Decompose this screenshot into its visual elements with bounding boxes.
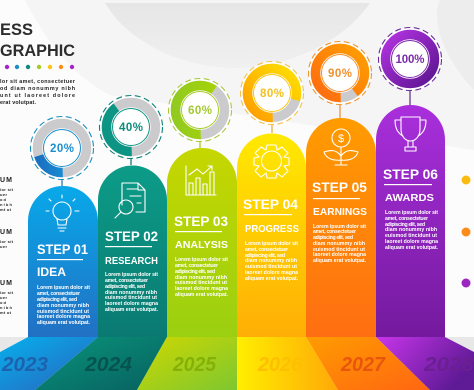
left side list: uer [0, 244, 7, 249]
left side list: uer [0, 295, 7, 300]
years [1, 354, 474, 376]
step 1 paragraph [37, 285, 91, 326]
left side list: nibh [0, 305, 13, 310]
icon: trophy [395, 117, 426, 151]
step 1 text: STEP 01 [37, 242, 88, 257]
step 2 paragraph: adipiscing elit, sed [105, 284, 145, 290]
left side list: uer [0, 192, 7, 197]
step 2 paragraph [105, 272, 159, 313]
colored dots row [5, 65, 74, 69]
step 4 paragraph: laoreet dolore magna [245, 270, 298, 276]
icon: dollar sign: $ [338, 133, 344, 145]
step 3 paragraph: laoreet dolore magna [175, 286, 228, 292]
step 4 [237, 134, 306, 337]
step 1 text: IDEA [37, 265, 66, 279]
step 1 paragraph: adipiscing elit, sed [37, 297, 77, 303]
intro paragraph [0, 79, 76, 106]
step 1 [28, 186, 98, 337]
progress ring 60%: 60% [188, 105, 212, 117]
step 1 paragraph: aliquam erat volutpat. [37, 320, 91, 326]
step 3 paragraph: Lorem ipsum dolor sit [175, 257, 228, 263]
step 5 paragraph: aliquam erat volutpat. [313, 258, 367, 264]
icon: gear [254, 145, 289, 178]
step 6 paragraph: amet, consectetuer [385, 216, 428, 222]
right side bullets [462, 176, 470, 288]
left side list: mt ut [0, 310, 12, 315]
years: 2024 [84, 354, 132, 376]
step 4 paragraph: aliquam erat volutpat. [245, 276, 299, 282]
step 4 paragraph: diam nonummy nibh [245, 258, 297, 264]
step 6 paragraph: aliquam erat volutpat. [385, 245, 439, 251]
progress ring 90%: 90% [328, 68, 352, 80]
step 2 text [105, 229, 158, 267]
step 5 paragraph [313, 224, 367, 264]
progress ring 40%: 40% [119, 122, 143, 134]
step 5 paragraph: Lorem ipsum dolor sit [313, 224, 366, 230]
step 2 paragraph: diam nonummy nibh [105, 290, 157, 296]
step 4 paragraph: adipiscing elit, sed [245, 253, 285, 259]
step 5 text: STEP 05 [312, 180, 367, 195]
step 4 paragraph [245, 241, 299, 282]
step 5 paragraph: euismod tincidunt ut [313, 247, 365, 253]
progress ring 40% [100, 96, 162, 165]
step 6 paragraph: laoreet dolore magna [385, 239, 438, 245]
step 3 [167, 148, 237, 337]
step 6 text: AWARDS [385, 192, 434, 204]
step 5 paragraph: adipiscing elit, sed [313, 235, 353, 241]
step 4 paragraph: euismod tincidunt ut [245, 264, 297, 270]
icon: magnifier on document [115, 183, 145, 218]
step 6 paragraph: euismod tincidunt ut [385, 233, 437, 239]
step 1 text [37, 242, 88, 279]
step 3 paragraph: aliquam erat volutpat. [175, 292, 229, 298]
left side list: UM [0, 280, 12, 287]
step 3 paragraph: diam nonummy nibh [175, 275, 227, 281]
step 6 text [383, 167, 438, 204]
step 2 paragraph: amet, consectetuer [105, 278, 148, 284]
step 2 paragraph: euismod tincidunt ut [105, 295, 157, 301]
progress ring 100%: 100% [396, 54, 424, 66]
left side list: UM [0, 229, 12, 236]
step 3 paragraph: euismod tincidunt ut [175, 280, 227, 286]
step 1 paragraph: euismod tincidunt ut [37, 309, 89, 315]
progress ring 80%: 80% [260, 88, 284, 100]
progress ring 60% [168, 78, 232, 148]
step 1 paragraph: diam nonummy nibh [37, 303, 89, 309]
years: 2028 [423, 354, 474, 376]
step 6 paragraph: diam nonummy nibh [385, 227, 437, 233]
step 2 [98, 166, 167, 337]
intro paragraph: od diam nonummy nibh [0, 86, 75, 92]
left side list: od [0, 300, 7, 305]
step 3 paragraph [175, 257, 229, 298]
title: GRAPHIC [0, 41, 75, 60]
left side list: UM [0, 177, 12, 184]
years: 2025 [172, 354, 217, 376]
left side list: lor sit [0, 187, 14, 192]
step 5 paragraph: laoreet dolore magna [313, 252, 366, 258]
floor [0, 337, 474, 390]
title: ESS [0, 20, 33, 39]
intro paragraph: erat volutpat. [0, 100, 36, 106]
step 2 text: RESEARCH [105, 255, 158, 267]
progress ring 20%: 20% [50, 143, 74, 155]
left side list: lor sit [0, 239, 14, 244]
step 2 paragraph: aliquam erat volutpat. [105, 307, 159, 313]
step 6 paragraph [385, 210, 439, 251]
step 2 text: STEP 02 [105, 229, 158, 244]
step 2 paragraph: laoreet dolore magna [105, 301, 158, 307]
step 2 paragraph: Lorem ipsum dolor sit [105, 272, 158, 278]
step 4 text: PROGRESS [245, 223, 299, 235]
step 4 paragraph: Lorem ipsum dolor sit [245, 241, 298, 247]
step 5 [306, 118, 376, 337]
step 6 paragraph: Lorem ipsum dolor sit [385, 210, 438, 216]
icon: light bulb [46, 195, 79, 231]
years: 2023 [1, 354, 48, 376]
progress ring 100% [378, 28, 442, 105]
progress ring 20% [30, 116, 94, 186]
step 3 paragraph: adipiscing elit, sed [175, 269, 215, 275]
step 5 text: EARNINGS [313, 206, 367, 218]
title [0, 20, 75, 60]
left side list: lor sit [0, 290, 14, 295]
step 6 paragraph: adipiscing elit, sed [385, 222, 425, 228]
left side list: nibh [0, 202, 13, 207]
step 5 paragraph: diam nonummy nibh [313, 241, 365, 247]
icon: bar chart [186, 166, 216, 195]
step 5 paragraph: amet, consectetuer [313, 229, 356, 235]
left side list [0, 177, 14, 315]
progress ring 90% [308, 42, 372, 118]
intro paragraph: unt ut laoreet dolore [0, 93, 75, 99]
step 4 paragraph: amet, consectetuer [245, 247, 288, 253]
step 3 text: STEP 03 [174, 214, 228, 229]
step 3 text: ANALYSIS [175, 239, 228, 251]
step 5 text [312, 180, 367, 218]
step 3 paragraph: amet, consectetuer [175, 263, 218, 269]
step 1 paragraph: Lorem ipsum dolor sit [37, 285, 90, 291]
step 1 paragraph: amet, consectetuer [37, 291, 80, 297]
icon: money plant [324, 129, 358, 165]
step 3 text [174, 214, 228, 251]
intro paragraph: lor sit amet, consectetuer [0, 79, 76, 85]
step 6 [376, 105, 445, 337]
years: 2027 [340, 354, 386, 376]
step 4 text [243, 197, 299, 235]
progress ring 80% [240, 62, 304, 133]
years: 2026 [257, 354, 303, 376]
step 6 text: STEP 06 [383, 167, 438, 182]
step 4 text: STEP 04 [243, 197, 298, 212]
left side list: od [0, 197, 7, 202]
left side list: mt ut [0, 207, 12, 212]
step 1 paragraph: laoreet dolore magna [37, 314, 90, 320]
